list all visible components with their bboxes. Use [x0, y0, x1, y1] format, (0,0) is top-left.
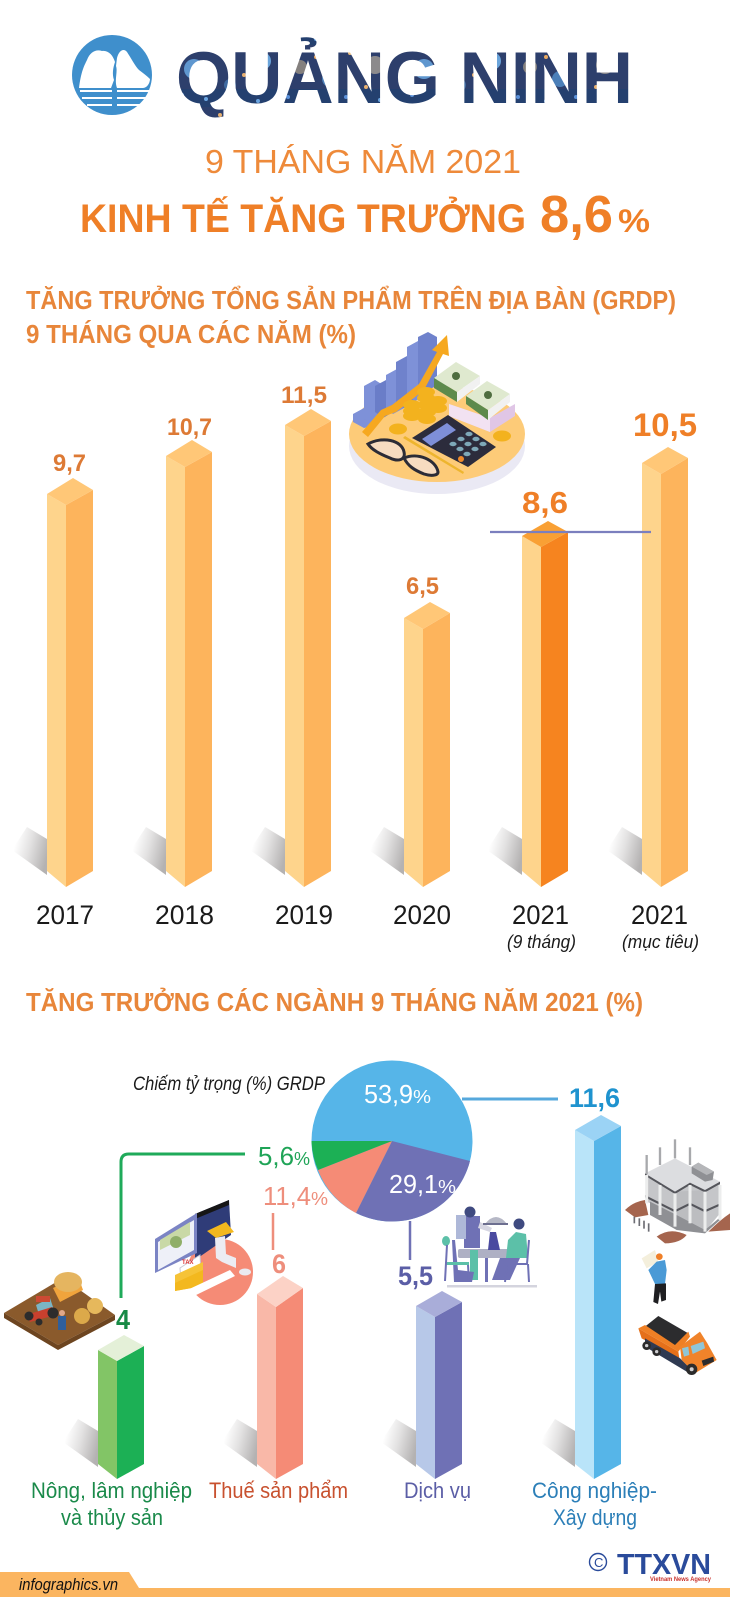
icon: tax and online payment: [155, 1200, 253, 1305]
share label: 11,4%: %: [311, 1189, 328, 1209]
chart: sector bars: [63, 1115, 621, 1479]
axis labels: years: (9 tháng): [507, 932, 576, 952]
caption: pie: Chiếm tỷ trọng (%) GRDP: [133, 1074, 325, 1095]
heading: sectors section: TĂNG TRƯỞNG CÁC NGÀNH 9 THÁNG NĂM 2021 (%): [26, 986, 643, 1017]
values: GRDP: 6,5: [406, 573, 439, 600]
icon: dump truck: [638, 1316, 717, 1375]
label: industry and construction: Xây dựng: [553, 1505, 637, 1530]
icon: engineer with blueprint: [642, 1250, 667, 1304]
values: GRDP: [53, 382, 697, 600]
share label: 5,6%: %: [294, 1149, 310, 1169]
bar: 2020: [369, 602, 450, 887]
bar: 2017: [12, 478, 93, 887]
connector: purple: [409, 1221, 411, 1260]
heading: GRDP section: TĂNG TRƯỞNG TỔNG SẢN PHẨM TRÊN ĐỊA BÀN (GRDP): [26, 284, 676, 315]
share label: 5,6%: 5,6: [258, 1141, 294, 1171]
label: industry and construction: [532, 1478, 657, 1530]
pie label: 29,1%: 29,1: [389, 1169, 438, 1199]
headline: %: [618, 203, 650, 239]
axis labels: years: [36, 900, 699, 952]
logo: Quảng Ninh emblem: [72, 35, 152, 115]
pie label: 53,9%: 53,9: [364, 1079, 413, 1109]
axis labels: years: 2021: [631, 900, 688, 930]
axis labels: years: 2020: [393, 900, 451, 930]
label: agriculture: [31, 1478, 192, 1530]
icon: tax and online payment: TAX: [182, 1260, 194, 1266]
label: industry and construction: Công nghiệp-: [532, 1478, 657, 1503]
pie label: 29,1%: %: [438, 1177, 456, 1197]
value: 4: 4: [116, 1304, 130, 1335]
values: GRDP: 10,7: [167, 414, 212, 441]
axis labels: years: 2021: [512, 900, 569, 930]
value: 5,5: 5,5: [398, 1261, 433, 1291]
bar: product tax: [222, 1276, 303, 1479]
value: 11,6: 11,6: [569, 1083, 620, 1113]
axis labels: years: 2017: [36, 900, 94, 930]
connector: blue: [462, 1098, 558, 1100]
title: QUẢNG NINH: [176, 38, 633, 119]
label: product tax: Thuế sản phẩm: [209, 1478, 348, 1503]
share label: 5,6%: [258, 1141, 310, 1171]
values: GRDP: 11,5: [281, 382, 327, 409]
connector: green: [121, 1154, 245, 1298]
values: GRDP: 9,7: [53, 450, 86, 477]
headline: [80, 186, 650, 244]
bar: 2021 target: [607, 447, 688, 887]
bar: services: [381, 1291, 462, 1479]
axis labels: years: (mục tiêu): [622, 932, 699, 952]
footer band: [0, 1572, 730, 1597]
logo: TTXVN: C: [594, 1555, 603, 1570]
share label: 11,4%: 11,4: [263, 1181, 311, 1211]
label: agriculture: và thủy sản: [61, 1505, 163, 1530]
bar: 2019: [250, 409, 331, 887]
heading: GRDP section: [26, 284, 676, 349]
logo: TTXVN: Vietnam News Agency: [650, 1576, 711, 1583]
bar: 2018: [131, 440, 212, 887]
line: 2021 target comparison: [490, 531, 651, 533]
pie chart: GRDP share: [312, 1060, 472, 1222]
axis labels: years: 2018: [155, 900, 214, 930]
value: 6: 6: [272, 1249, 286, 1279]
icon: farm with tractor: [4, 1272, 115, 1350]
pie label: 53,9%: %: [413, 1087, 431, 1107]
headline: 8,6: [540, 186, 613, 244]
logo: TTXVN: TTXVN: [617, 1549, 711, 1581]
headline: KINH TẾ TĂNG TRƯỞNG: [80, 195, 526, 241]
bar: 2021 nine months: [487, 521, 568, 887]
labels: sectors: [31, 1478, 657, 1530]
footer text: infographics.vn: [19, 1575, 118, 1594]
chart: GRDP growth bars: [12, 409, 688, 887]
subtitle: 9 THÁNG NĂM 2021: [205, 143, 521, 180]
connector: pink: [272, 1213, 274, 1250]
label: agriculture: Nông, lâm nghiệp: [31, 1478, 192, 1503]
values: GRDP: 10,5: [633, 407, 697, 443]
icon: finance illustration: [349, 332, 525, 494]
values: GRDP: 8,6: [522, 485, 568, 520]
axis labels: years: 2019: [275, 900, 333, 930]
icon: building under construction: [625, 1139, 730, 1243]
heading: GRDP section: 9 THÁNG QUA CÁC NĂM (%): [26, 319, 356, 349]
icon: restaurant waiter and diner: [442, 1206, 537, 1288]
bar: agriculture: [63, 1335, 144, 1479]
bar: industry and construction: [540, 1115, 621, 1479]
label: services: Dịch vụ: [404, 1478, 471, 1503]
